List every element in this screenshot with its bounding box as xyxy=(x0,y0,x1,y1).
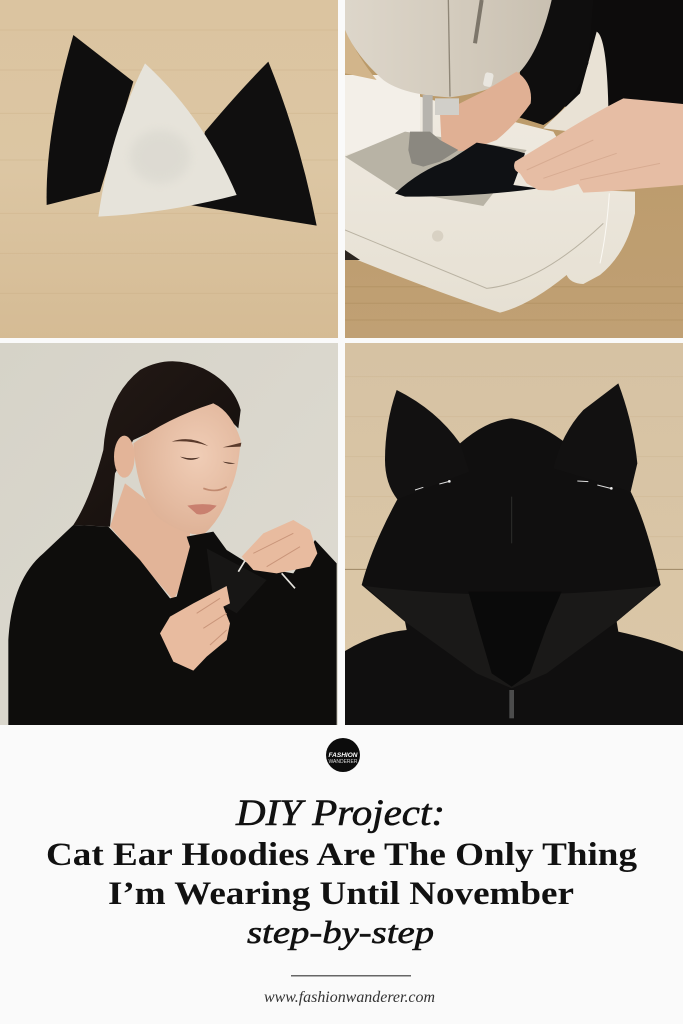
title: step-by-step xyxy=(247,914,434,950)
interfacing mottling xyxy=(138,138,182,176)
needle xyxy=(238,561,295,588)
logo badge: WANDERER xyxy=(329,759,358,765)
divider line xyxy=(291,975,411,976)
title: DIY Project: xyxy=(235,793,445,834)
panel: felt ear pieces on wood xyxy=(0,0,340,340)
table and backdrop xyxy=(340,0,683,340)
title xyxy=(46,793,638,950)
hood inner shading xyxy=(365,586,658,688)
panel: woman pinning hoodie xyxy=(0,340,340,727)
left ear xyxy=(385,390,460,500)
white interfacing triangle xyxy=(98,63,237,217)
arm sleeve xyxy=(520,62,588,125)
lower hand xyxy=(160,586,230,671)
wood background xyxy=(345,343,683,652)
facial features xyxy=(172,439,241,515)
right hand xyxy=(514,98,683,193)
center seam xyxy=(511,496,512,544)
title: Cat Ear Hoodies Are The Only Thing xyxy=(46,837,638,873)
title: I’m Wearing Until November xyxy=(108,876,574,912)
hoodie ear fabric piece xyxy=(207,548,267,613)
black hoodie xyxy=(8,525,337,725)
wall background xyxy=(0,340,340,727)
upper hand xyxy=(242,520,317,573)
hand behind needle xyxy=(440,72,531,151)
panel: hoodie with pinned ears xyxy=(340,340,683,727)
panel: sewing machine xyxy=(340,0,683,340)
black fabric ear xyxy=(395,143,538,197)
needle plate xyxy=(345,132,527,206)
hood opening xyxy=(468,592,562,687)
wood table background xyxy=(0,0,340,340)
hoodie body and hood xyxy=(344,418,683,725)
zipper xyxy=(509,690,514,718)
logo badge: FASHION xyxy=(329,752,358,759)
finger creases xyxy=(197,533,300,645)
right ear xyxy=(562,383,638,492)
finger lines xyxy=(527,140,660,180)
presser foot xyxy=(408,95,459,167)
face xyxy=(133,403,241,535)
ear xyxy=(114,436,135,478)
logo badge xyxy=(326,738,360,772)
neck xyxy=(110,483,190,600)
hair xyxy=(73,361,241,527)
website url: www.fashionwanderer.com xyxy=(264,989,435,1006)
machine head xyxy=(345,0,552,97)
black felt ear right xyxy=(190,62,317,226)
machine base xyxy=(345,75,635,313)
black felt ear left xyxy=(47,35,133,205)
